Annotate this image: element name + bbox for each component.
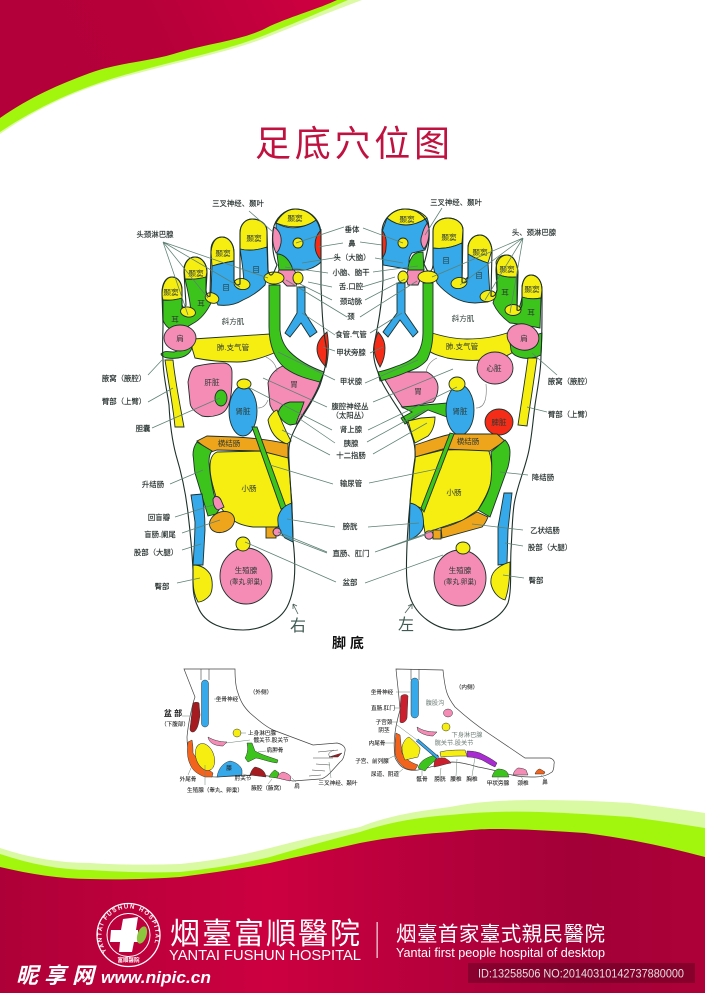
outer labels: right foot left column: 升结肠: [142, 480, 164, 489]
left foot organ labels: 耳: [527, 308, 535, 317]
left foot marker with arrow: 左: [398, 616, 414, 634]
panel: right foot sole: [148, 209, 347, 630]
inner view labels: 鼻: [542, 778, 548, 786]
slogan english: Yantai first people hospital of desktop: [396, 946, 605, 960]
left foot outline: [373, 209, 542, 630]
image id box: ID:13258506 NO:20140310142737880000: [478, 968, 684, 980]
outer view labels: 上身淋巴腺: [248, 729, 276, 737]
logo ring text: [102, 908, 156, 953]
outer labels: right foot left column: [102, 199, 264, 591]
inner view labels: 坐骨神经: [371, 688, 394, 696]
plexus and kidney: [401, 352, 513, 443]
outer labels: left foot right column: 臂部（上臂）: [548, 410, 592, 419]
outer labels: centre column: 舌.口腔: [339, 282, 364, 291]
lung and shoulder regions: [428, 320, 542, 426]
toe pads and under toe regions: [162, 219, 284, 331]
outer view labels: （外侧）: [250, 688, 272, 696]
outer labels: right foot left column: 胆囊: [136, 424, 151, 433]
hospital logo: YANTAI FUSHUN HOSPITAL: [98, 904, 160, 953]
right foot organ labels: 颞窦: [246, 233, 262, 243]
left foot organ labels: 目: [442, 256, 450, 265]
right foot organ labels: 肺.支气管: [217, 342, 250, 352]
right foot organ labels: 小肠: [241, 483, 257, 493]
outer labels: centre column: 小脑、脑干: [333, 268, 369, 277]
right foot organ labels: 生殖腺: [235, 565, 258, 575]
toe outlines: [309, 750, 338, 776]
lower leg and gonad regions: [434, 493, 512, 606]
left foot organ labels: 胃: [414, 387, 422, 396]
outer labels: centre column: 输尿管: [340, 479, 362, 488]
outer labels: left foot right column: 腋窝（腋腔）: [548, 377, 592, 386]
stomach: [384, 372, 438, 408]
left foot organ labels: 肩: [520, 333, 528, 343]
stomach: [268, 366, 320, 424]
outer labels: centre column: 肾上腺: [340, 425, 363, 434]
right foot organ labels: (睾丸.卵巢): [230, 577, 262, 586]
connecting thin vessels: [426, 358, 486, 408]
big toe regions: [374, 209, 429, 367]
outer view labels: 三叉神经、颞叶: [318, 779, 358, 787]
right foot organ labels: 肝脏: [204, 377, 220, 387]
inner view labels: 阴茎: [378, 726, 390, 734]
logo green leaf: [135, 925, 149, 945]
right foot organ labels: 目: [222, 283, 230, 292]
inner view labels: 胸椎: [466, 775, 478, 783]
inner view labels: 腹股沟: [426, 699, 444, 707]
intestines: [193, 427, 293, 542]
outer view labels: 腋腔（腋窝）: [251, 784, 285, 792]
right foot organ labels: 斜方肌: [222, 316, 245, 326]
outer labels: centre column: 腹腔神经丛: [332, 402, 368, 411]
image id box: [468, 963, 695, 983]
inner view labels: 髋关节.股关节: [435, 739, 473, 747]
outer labels: left foot right column: 三叉神经、颞叶: [430, 198, 482, 207]
outer view labels: 肩: [294, 782, 300, 790]
panel: inner side foot view: [355, 669, 554, 787]
outer view labels: 坐骨神经: [216, 695, 239, 703]
top red and green wave banner: [0, 0, 362, 134]
watermark nipic: www.nipic.cn: [101, 968, 211, 987]
left foot organ labels: 肾脏: [452, 406, 468, 416]
slogan chinese: 烟臺首家臺式親民醫院: [396, 917, 605, 947]
outer labels: centre column: 食管.气管: [335, 330, 367, 339]
big toe regions: [273, 209, 328, 367]
inner view leader lines: [384, 692, 545, 780]
hospital name chinese: 烟臺富順醫院: [170, 909, 360, 953]
logo outer ring: [97, 904, 160, 966]
inner view labels: 子宫、前列腺: [355, 757, 389, 765]
duodenum and solar plexus: [268, 402, 304, 444]
left foot organ labels: 颞窦: [499, 264, 515, 274]
outer view labels: 肘关节: [235, 774, 252, 782]
right foot organ labels: 颞窦: [287, 213, 303, 223]
panel: left foot sole: [360, 208, 557, 630]
outer foot outline: [184, 669, 345, 781]
left foot organ labels: 颞窦: [472, 247, 488, 257]
right foot marker with arrow: [290, 604, 306, 635]
right foot organ labels: 目: [252, 265, 260, 274]
outer labels: centre column: 膀胱: [343, 522, 358, 531]
right foot organ labels: 颞窦: [215, 248, 231, 258]
inner view labels: （内侧）: [456, 683, 478, 691]
right foot organ labels: 颞窦: [188, 268, 204, 278]
outer labels: centre column: 垂体: [345, 225, 360, 234]
outer labels: right foot left column: 臀部: [155, 582, 169, 591]
outer view labels: 外尾骨: [180, 775, 197, 783]
outer labels: centre column: 盆部: [343, 578, 357, 587]
left foot outline fill: [373, 209, 542, 630]
sole caption: 脚 底: [332, 635, 364, 651]
outer labels: left foot right column: [430, 198, 592, 585]
right foot organ labels: 耳: [171, 315, 179, 324]
green thyroid band: [378, 283, 433, 381]
outer labels: right foot left column: 盲肠.阑尾: [144, 530, 176, 539]
left foot organ labels: (睾丸.卵巢): [444, 577, 476, 586]
toe pads and under toe regions: [418, 218, 542, 328]
right foot marker with arrow: 右: [290, 617, 306, 635]
inner view labels: 内尾骨: [369, 739, 386, 747]
inner view labels: 骶骨: [416, 775, 428, 783]
right foot organ labels: 颞窦: [163, 287, 179, 297]
coloured outer reflex zones: [187, 702, 342, 781]
outer labels: right foot left column: 臂部（上臂）: [102, 397, 146, 406]
outer view labels: （下腹部）: [161, 720, 189, 728]
green thyroid band: [269, 285, 324, 382]
inner sciatic tube: [411, 669, 419, 718]
left foot organ labels: 目: [475, 271, 483, 280]
outer labels: left foot right column: 头、颈淋巴腺: [512, 228, 557, 237]
outer view labels: 盆 部: [164, 708, 182, 718]
inner view labels: 尿道、阴道: [371, 770, 399, 778]
outer labels: centre column: （太阳丛）: [332, 411, 368, 420]
hospital name english: YANTAI FUSHUN HOSPITAL: [169, 948, 361, 964]
left foot organ labels: 横结肠: [457, 436, 480, 446]
outer labels: left foot right column: 乙状结肠: [530, 526, 560, 535]
outer labels: centre column: [332, 225, 370, 587]
outer labels: right foot left column: 回盲瓣: [148, 513, 171, 522]
outer labels: centre column: 鼻: [348, 239, 356, 248]
inner view labels: 子宫颈: [376, 718, 393, 726]
inner view labels: 膀胱: [434, 775, 446, 783]
outer view labels: 髋关节.股关节: [253, 736, 289, 744]
outer labels: centre column: 胰腺: [344, 439, 359, 448]
right foot organ labels: [163, 213, 303, 586]
outer labels: right foot left column: 三叉神经、颞叶: [212, 199, 264, 208]
outer view leader lines: [182, 699, 331, 785]
left foot organ labels: 脾脏: [491, 417, 507, 427]
sciatic nerve tube: [201, 669, 209, 727]
left foot organ labels: 心脏: [486, 363, 502, 373]
inner foot outline: [394, 669, 554, 777]
logo cross: [110, 917, 138, 952]
inner view labels: 腰椎: [450, 775, 462, 783]
connecting thin vessels: [258, 357, 277, 408]
outer labels: left foot right column: 降结肠: [532, 473, 554, 482]
watermark nipic: [16, 958, 211, 990]
right foot organ labels: 胃: [290, 380, 298, 389]
logo ring bottom characters: 富順醫院: [117, 956, 140, 964]
outer labels: centre column: 甲状腺: [340, 377, 363, 386]
left foot organ labels: 耳: [501, 288, 509, 297]
left foot marker with arrow: [398, 604, 414, 634]
divider: [376, 922, 378, 958]
panel: outer side foot view: [161, 669, 358, 794]
intestines: [409, 433, 510, 540]
outer labels: centre column: 颈: [347, 312, 355, 321]
lung and shoulder regions: [161, 325, 274, 427]
left foot organ labels: 颞窦: [524, 284, 540, 294]
outer labels: right foot left column: 头颈淋巴腺: [137, 230, 174, 239]
right foot organ labels: 横结肠: [218, 438, 241, 448]
bottom wave banner: [0, 800, 705, 993]
watermark nipic: 昵享网: [16, 958, 97, 990]
outer labels: centre column: 直肠、肛门: [333, 549, 369, 558]
outer view labels: [161, 688, 358, 794]
right foot outline: [162, 209, 327, 630]
outer labels: centre column: 头（大脑）: [334, 253, 370, 262]
right foot organ labels: 肩: [176, 333, 184, 343]
coloured inner reflex zones: [395, 694, 545, 777]
inner view labels: 下身淋巴腺: [452, 731, 483, 739]
inner view labels: [355, 683, 548, 787]
left foot organ labels: 肺.支气管: [446, 341, 479, 351]
outer labels: centre column: 颈动脉: [340, 297, 363, 306]
outer labels: left foot right column: 股部（大腿）: [528, 543, 572, 552]
lower leg and gonad regions: [191, 494, 272, 604]
liver, kidney and gall bladder: [188, 363, 257, 436]
left foot organ labels: 生殖腺: [449, 565, 472, 575]
left foot organ labels: 颞窦: [441, 232, 457, 242]
title: 足底穴位图: [255, 115, 450, 167]
outer labels: right foot left column: 股部（大腿）: [134, 548, 178, 557]
outer view labels: 肩胛骨: [267, 746, 284, 754]
outer labels: centre column: 十二指肠: [336, 451, 366, 460]
inner view labels: 颈椎: [517, 779, 529, 787]
outer labels: left foot right column: 臀部: [529, 576, 543, 585]
left foot organ labels: 小肠: [446, 487, 462, 497]
outer view labels: 生殖腺（睾丸、卵巢）: [187, 786, 243, 794]
outer view labels: 膝: [226, 764, 232, 772]
outer labels: right foot left column: 腋窝（腋腔）: [102, 374, 146, 383]
left foot organ labels: 颞窦: [399, 214, 415, 224]
inner view labels: 直肠.肛门: [371, 704, 395, 712]
right foot organ labels: 耳: [197, 299, 205, 308]
right foot organ labels: 肾脏: [235, 406, 251, 416]
right foot outline fill: [162, 209, 327, 630]
right foot leader lines: [148, 211, 347, 583]
outer labels: centre column: 甲状旁腺: [336, 348, 366, 357]
left foot organ labels: [399, 214, 540, 586]
left foot organ labels: 斜方肌: [452, 313, 475, 323]
inner view labels: 甲状旁腺: [487, 779, 510, 787]
left foot leader lines: [360, 208, 557, 583]
